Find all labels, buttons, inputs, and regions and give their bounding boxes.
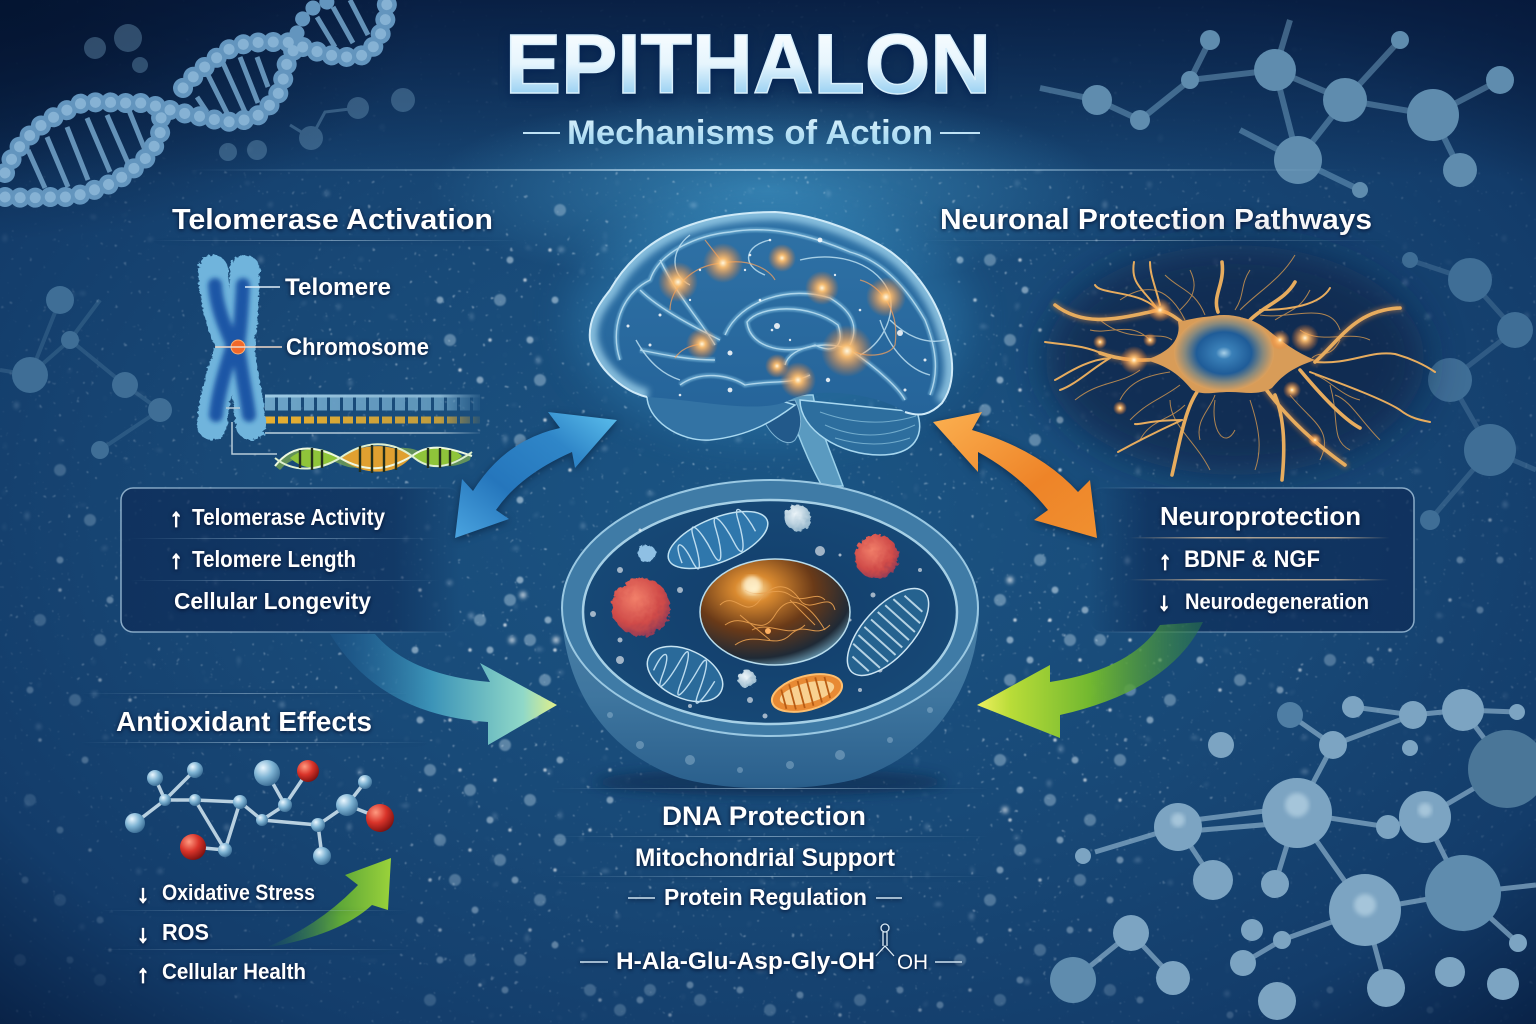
icon: telomere strip: [265, 396, 480, 433]
antioxidant molecule: [125, 760, 394, 865]
DNA strands: [5, 2, 387, 198]
row: BDNF and NGF: BDNF & NGF: [1184, 546, 1320, 573]
molecule network: left side: [0, 286, 172, 459]
organelle: white lower: [738, 670, 756, 688]
list: antioxidant outcomes: [100, 880, 410, 988]
organelle: red small: [855, 535, 899, 579]
label: Telomere: Telomere: [285, 274, 391, 301]
row: cellular health: [137, 959, 306, 988]
mitochondrion: orange: [768, 667, 846, 719]
mitochondrion: lower left: [639, 635, 731, 713]
cerebellum: [800, 400, 920, 455]
molecule network: top right: [1040, 20, 1514, 198]
telomere leader line: [245, 286, 280, 288]
peptide formula: H-Ala-Glu-Asp-Gly-OH: [616, 948, 875, 975]
cell illustration: [562, 480, 979, 796]
organelle: blue small: [638, 545, 656, 563]
row: ROS: [137, 919, 209, 948]
arrow: green arrow to cell: [977, 622, 1203, 738]
subtitle: Mechanisms of Action: [567, 114, 933, 152]
chromosome illustration: [212, 270, 480, 473]
faint molecule near DNA: [84, 24, 415, 161]
temporal lobe: [647, 385, 795, 440]
brain outline: [590, 212, 952, 415]
molecule network: right side: [1402, 252, 1536, 530]
cell rim: [562, 480, 978, 736]
arrow: orange double arrow: [933, 412, 1097, 538]
heading: Neuronal Protection Pathways: Neuronal Protection Pathways: [940, 204, 1372, 236]
orange glow points: [1093, 298, 1322, 447]
row: oxidative stress: Oxidative Stress: [162, 880, 315, 905]
organelle: white upper: [785, 505, 811, 531]
row: telomere length: ↑: [170, 546, 182, 574]
neuron illustration: [1045, 245, 1435, 480]
bracket line: [226, 408, 277, 454]
row: cellular longevity: Cellular Longevity: [174, 588, 371, 614]
row: mitochondrial support: Mitochondrial Support: [635, 844, 896, 872]
heading: Antioxidant Effects: Antioxidant Effects: [116, 706, 372, 737]
row: neurodegeneration: Neurodegeneration: [1185, 589, 1369, 614]
glowing synapse nodes: [658, 243, 906, 398]
neuron cell body: [1145, 316, 1315, 393]
row: neuroprotection: Neuroprotection: [1160, 501, 1361, 531]
row: ROS: ROS: [162, 919, 209, 945]
dendrite glow: [1055, 305, 1400, 465]
row: cellular health: Cellular Health: [162, 959, 306, 984]
DNA helix background: [5, 0, 387, 198]
heading: Telomerase Activation: Telomerase Activation: [172, 204, 493, 236]
peptide formula: OH: [897, 951, 928, 974]
cell body: [562, 480, 979, 788]
panel: neuroprotection results: [1090, 488, 1414, 632]
row: oxidative stress: ↓: [137, 881, 149, 908]
cell body speckle: [607, 707, 933, 773]
midbrain lobe: [760, 400, 801, 443]
sparkle dots in brain: [626, 238, 926, 396]
row: telomerase activity: ↑: [170, 504, 182, 532]
cerebrum: [590, 212, 952, 415]
row: cellular health: ↑: [137, 961, 149, 988]
cell interior: [583, 500, 957, 724]
brain folds: [616, 230, 945, 400]
panel: telomerase results: [121, 488, 460, 632]
row: neurodegeneration: ↓: [1158, 588, 1170, 616]
chromosome leader line: [215, 346, 282, 348]
thin dendrites: [1075, 255, 1380, 470]
neuron nucleus: [1174, 315, 1274, 391]
row: telomerase activity: Telomerase Activity: [192, 504, 385, 530]
brain: [570, 200, 970, 486]
arrow: small green arrow: [265, 858, 391, 948]
orange fibres: [670, 240, 896, 358]
icon: DNA segment: [275, 444, 472, 473]
mitochondrion: right: [833, 575, 943, 689]
brain stem: [785, 395, 843, 486]
brain inner shading: [590, 212, 952, 403]
arrow: blue double arrow: [455, 412, 617, 538]
nucleus: [700, 559, 850, 665]
DNA rungs: [28, 0, 368, 188]
peptide formula: [580, 924, 962, 975]
main dendrites: [1045, 262, 1435, 480]
row: ROS: ↓: [137, 921, 149, 948]
row: BDNF and NGF: ↑: [1159, 547, 1172, 575]
row: DNA protection: DNA Protection: [662, 801, 866, 831]
molecule network: bottom right: [1050, 689, 1536, 1020]
title: EPITHALON: [505, 17, 991, 111]
row: telomere length: Telomere Length: [192, 546, 356, 572]
arrow: teal arrow to cell: [330, 634, 557, 745]
row: oxidative stress: [137, 880, 315, 908]
mitochondrion: upper: [661, 500, 775, 580]
organelle: red large: [612, 578, 670, 636]
list: cell outcomes: [550, 788, 990, 910]
label: Chromosome: Chromosome: [286, 334, 429, 361]
row: protein regulation: Protein Regulation: [664, 884, 867, 910]
cell sparkle: [590, 528, 923, 718]
icon: chromosome: [212, 270, 251, 425]
